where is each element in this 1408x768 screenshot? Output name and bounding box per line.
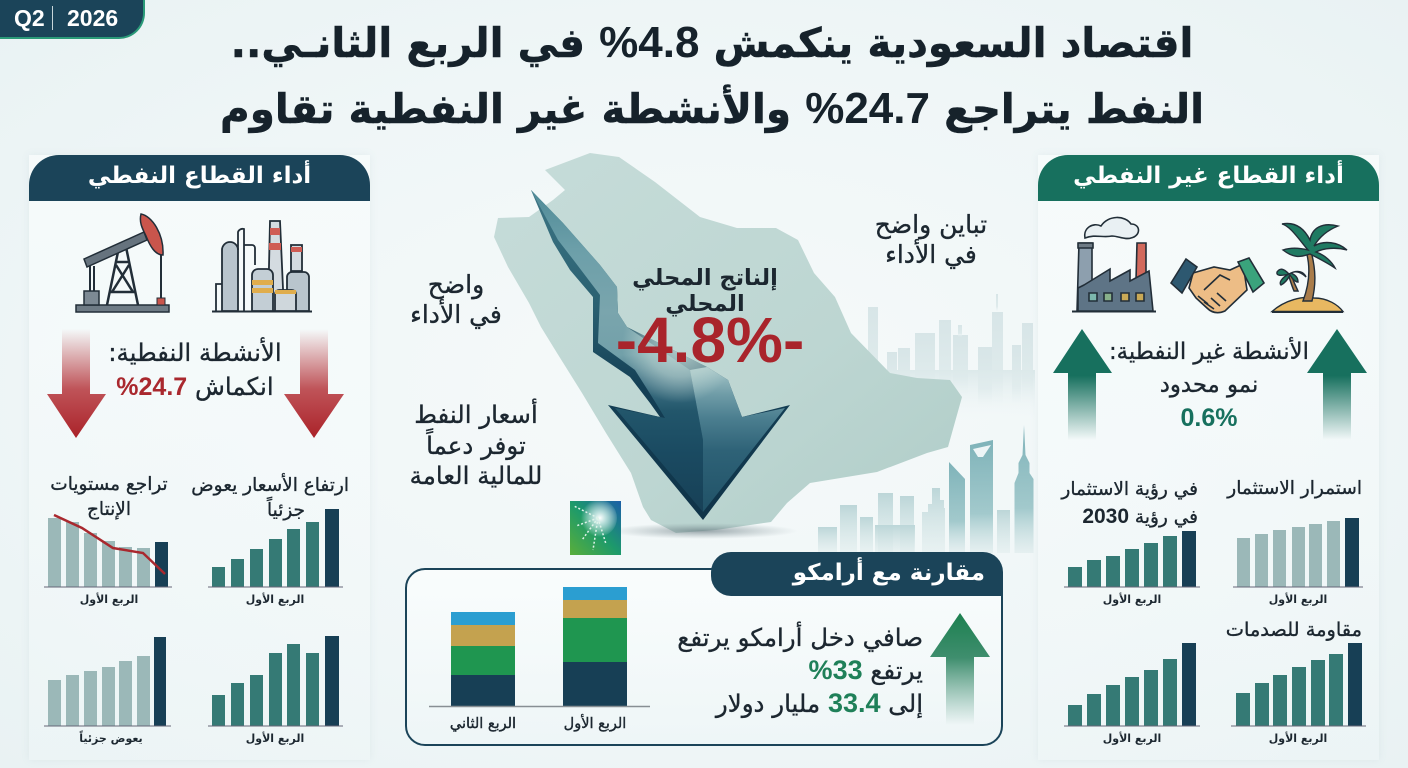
heading: production: تراجع مستويات (50, 474, 168, 495)
skyline: teal lower (818, 425, 1034, 553)
map of Saudi Arabia (494, 153, 962, 533)
title (220, 18, 1204, 134)
text: Aramco income: صافي دخل أرامكو يرتفع (677, 623, 923, 652)
heading: vision investment (1060, 479, 1198, 528)
arrow: red down left (47, 332, 106, 438)
heading: vision investment: في رؤية الاستثمار (1061, 479, 1198, 500)
text: GDP label (632, 265, 778, 317)
date tag (0, 0, 145, 39)
icon: pumpjack (75, 213, 170, 313)
text: clear (410, 270, 502, 330)
heading: production: الإنتاج (87, 499, 131, 520)
date tag: 2026 (67, 5, 118, 31)
chart: bottom left (1064, 643, 1200, 726)
label: first quarter: الربع الأول (564, 716, 626, 732)
heading: oil sector: أداء القطاع النفطي (88, 163, 311, 189)
text: clear: واضح (428, 270, 484, 299)
chart: price rise top (208, 509, 343, 588)
text: Aramco income: يرتفع 33% (809, 655, 923, 685)
text: Aramco income (677, 621, 923, 718)
heading: price: ارتفاع الأسعار يعوض (191, 475, 349, 496)
heading: oil sector (29, 155, 370, 201)
skyline: pale upper (850, 294, 1035, 420)
title: اقتصاد السعودية ينكمش 4.8% في الربع الثانـي.. (231, 18, 1193, 67)
text: GDP label: المحلي (665, 291, 745, 317)
arrow: green up right (1307, 329, 1367, 438)
heading: non-oil sector (1038, 155, 1379, 201)
chart: vision (1064, 531, 1200, 588)
number: GDP change: -4.8%- (616, 304, 804, 376)
label: chart top right: الربع الأول (1269, 593, 1327, 606)
panel: non-oil sector (1038, 155, 1379, 745)
text: oil activity: الأنشطة النفطية: (108, 338, 282, 367)
arrow: green up left (1053, 329, 1112, 438)
text: oil prices: للمالية العامة (410, 461, 542, 490)
label: chart top left: الربع الأول (1103, 593, 1161, 606)
text: non-oil activity: نمو محدود (1160, 372, 1258, 398)
date tag: Q2 (14, 5, 45, 31)
heading: price (191, 472, 349, 521)
text: clear: في الأداء (410, 300, 502, 329)
heading: continued investment: استمرار الاستثمار (1227, 478, 1362, 499)
text: contrast: تباين واضح (875, 210, 987, 239)
icon: factory (1072, 216, 1156, 312)
heading: vision investment: في رؤية 2030 (1082, 505, 1198, 528)
label: chart bottom right: الربع الأول (246, 732, 304, 745)
label: second quarter: الربع الثاني (450, 716, 516, 732)
icon: refinery (212, 220, 312, 312)
label: chart bottom right: الربع الأول (1269, 732, 1327, 745)
text: oil prices (410, 398, 542, 490)
text: oil prices: توفر دعماً (426, 430, 526, 460)
text: oil prices: أسعار النفط (414, 400, 538, 429)
text: oil activity (108, 337, 282, 401)
heading: production (50, 474, 168, 520)
icon: handshake (1170, 257, 1265, 314)
text: Aramco income: إلى 33.4 مليار دولار (716, 688, 923, 718)
arrow: red down right (284, 332, 344, 438)
text: oil activity: انكماش 24.7% (116, 372, 274, 401)
label: chart top right: الربع الأول (246, 593, 304, 606)
large down arrow (531, 190, 790, 520)
icon: palm trees (1270, 222, 1348, 313)
heading: Aramco comparison (711, 552, 1003, 596)
chart: investment pale (1233, 518, 1363, 588)
chart: resilience (1231, 643, 1366, 726)
text: non-oil activity: الأنشطة غير النفطية: (1109, 339, 1309, 365)
panel: oil sector (29, 155, 370, 745)
title: النفط يتراجع 24.7% والأنشطة غير النفطية تقاوم (220, 84, 1204, 133)
heading: non-oil sector: أداء القطاع غير النفطي (1073, 163, 1344, 189)
chart: production with red line (44, 514, 172, 588)
text: contrast: في الأداء (885, 240, 977, 269)
heading: price: جزئياً (267, 500, 305, 521)
chart: price bottom (208, 636, 343, 726)
text: non-oil activity (1109, 336, 1309, 432)
label: chart top left: الربع الأول (80, 593, 138, 606)
text: non-oil activity: 0.6% (1180, 404, 1237, 432)
heading: shock resilience: مقاومة للصدمات (1226, 618, 1362, 641)
label: chart bottom left: الربع الأول (1103, 732, 1161, 745)
label: chart bottom left: يعوض جزئياً (79, 732, 143, 745)
text: GDP label: إلناتج المحلي (632, 265, 778, 291)
chart: partial offset bottom (44, 637, 171, 726)
arrow shadow (608, 523, 798, 539)
text: contrast (875, 210, 987, 270)
panel: Aramco comparison (405, 568, 1003, 746)
heading: Aramco comparison: مقارنة مع أرامكو (793, 560, 985, 586)
